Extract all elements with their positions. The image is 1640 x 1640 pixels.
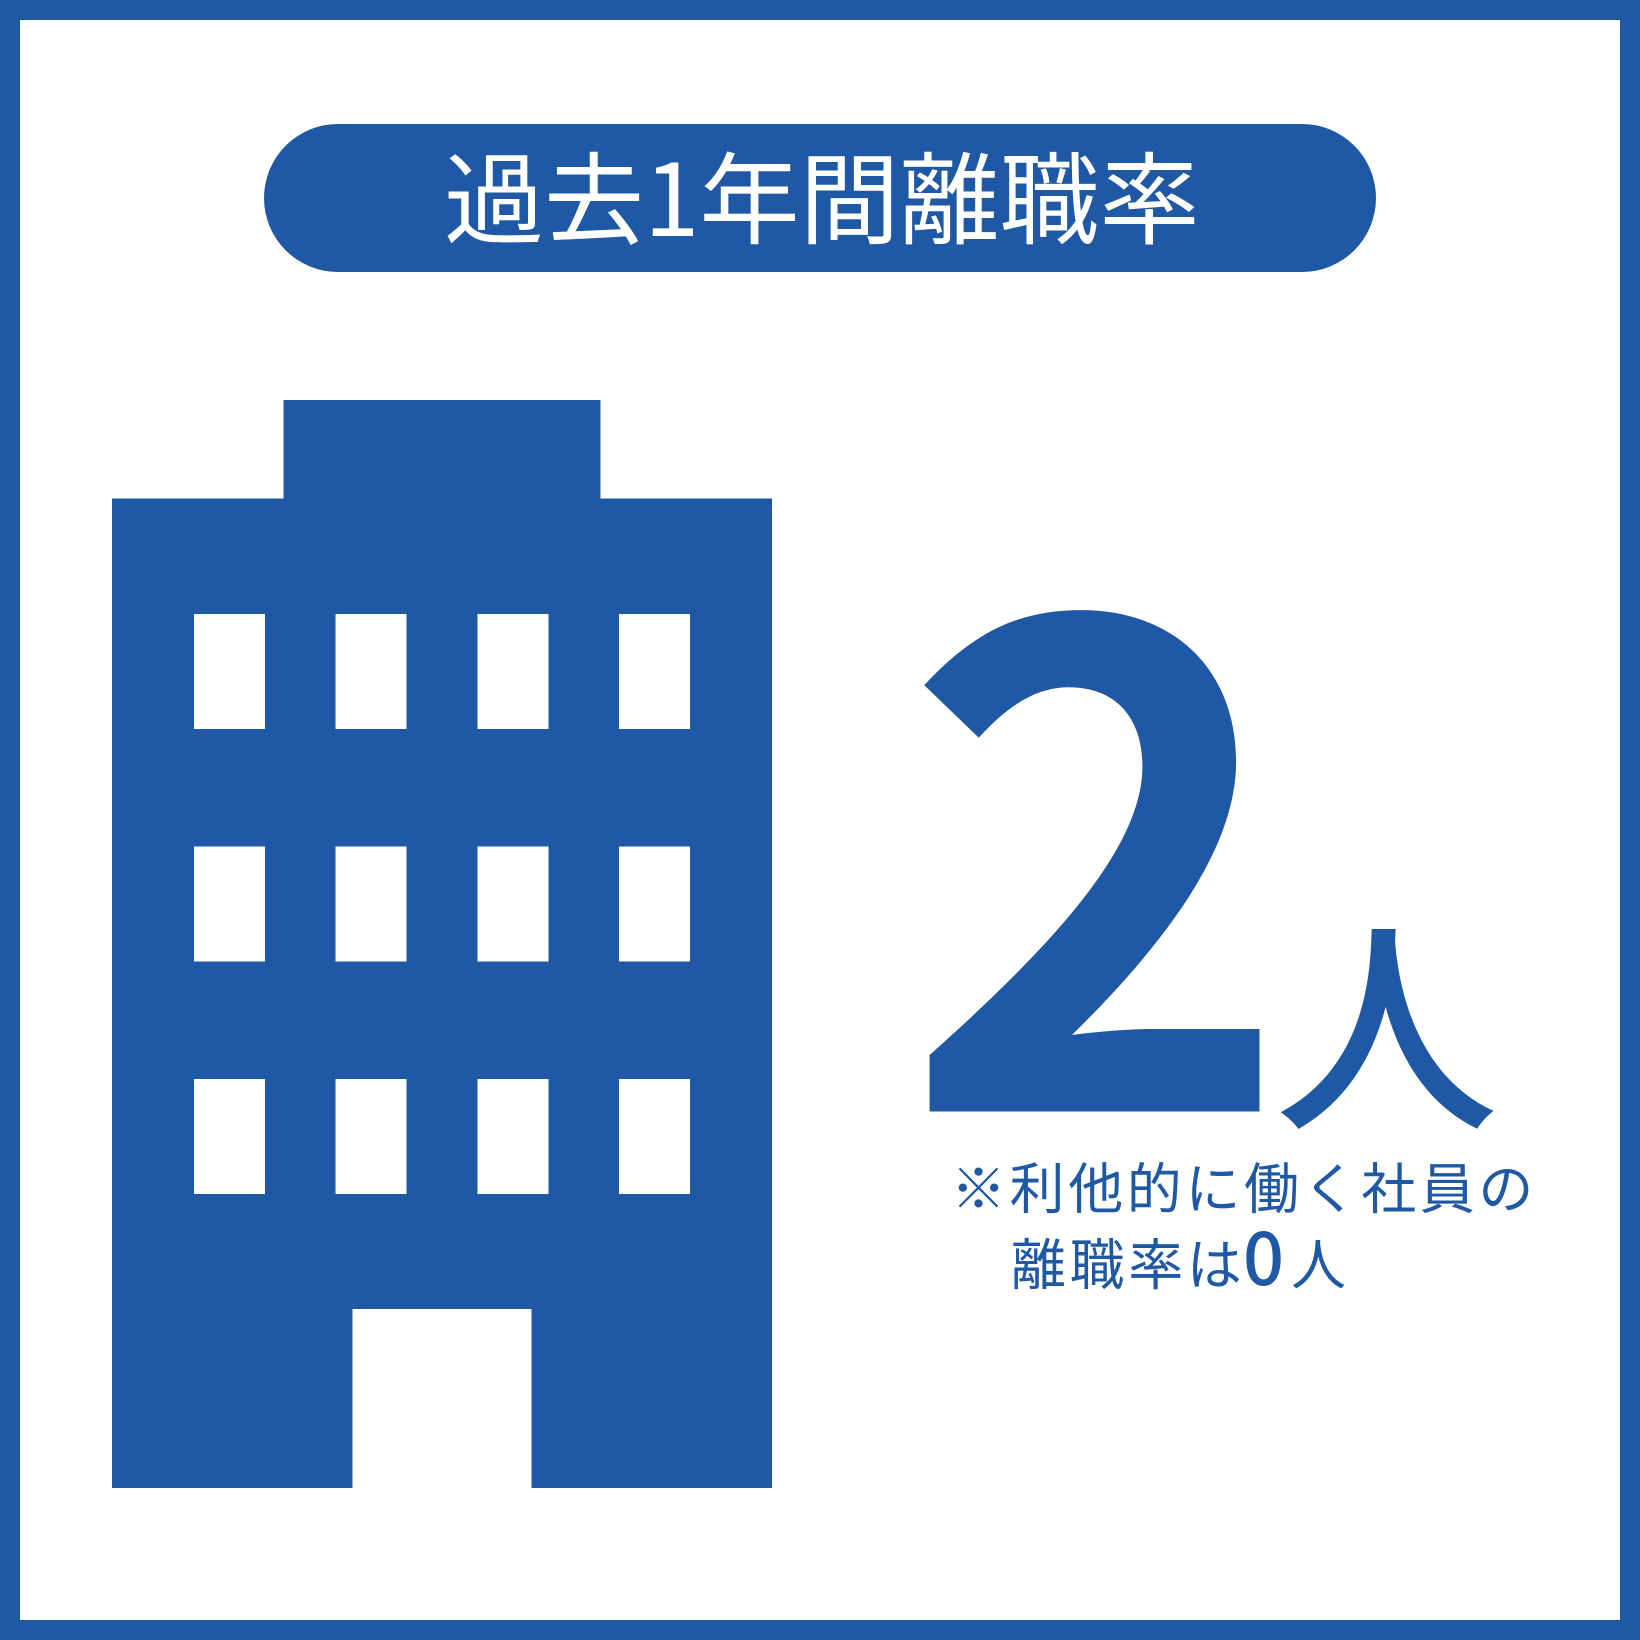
big figure: 2 people: 2 [901,340,1293,1304]
note second line: 離職率は [1011,1220,1245,1300]
big figure: 2 people [901,340,1498,1304]
note zero: 0 [1243,1201,1284,1306]
note unit: 人 [1291,1220,1346,1300]
title text: 過去1年間離職率 [444,120,1200,265]
title pill [264,120,1376,272]
note text [951,1144,1537,1306]
note text: ※利他的に働く社員の [951,1144,1537,1224]
icon: office building [112,400,772,1488]
unit: people: 人 [1274,852,1498,1177]
